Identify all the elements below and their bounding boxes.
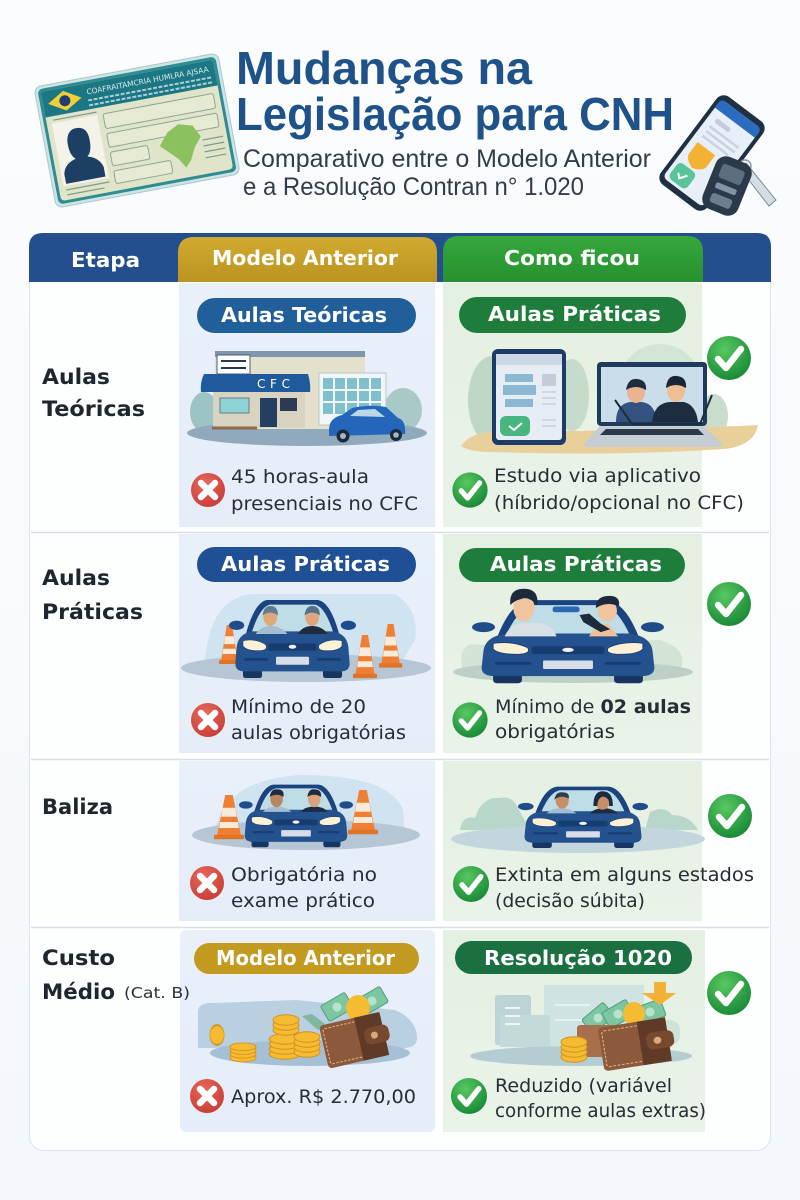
- pill: [194, 943, 419, 974]
- row label: Custo: [42, 946, 115, 970]
- icon: small check: [452, 472, 488, 508]
- icon: driver licence card: [34, 53, 240, 208]
- column heading: Como ficou: [443, 236, 703, 282]
- text: [495, 696, 691, 743]
- header bar: [29, 233, 771, 282]
- panel: new model: [443, 534, 702, 753]
- text: Mínimo de 02 aulas: [495, 696, 691, 718]
- text: [231, 864, 377, 912]
- text: Mínimo de 20: [231, 696, 366, 718]
- panel: new model: [443, 761, 754, 921]
- pill: [459, 297, 686, 333]
- title: Legislação para CNH: [236, 88, 674, 140]
- text: (híbrido/opcional no CFC): [494, 492, 744, 514]
- icon: small check: [452, 702, 488, 738]
- title: Mudanças na: [236, 42, 532, 94]
- column heading: Modelo Anterior: Modelo Anterior: [212, 246, 398, 270]
- text: presenciais no CFC: [231, 493, 418, 515]
- illustration: car with instructor and student: [453, 589, 693, 683]
- column heading: Modelo Anterior: [178, 237, 437, 282]
- text: Extinta em alguns estados: [495, 864, 754, 886]
- icon: cross: [190, 866, 224, 900]
- pill: [197, 547, 416, 582]
- panel: previous model: [179, 761, 435, 921]
- text: (decisão súbita): [495, 890, 645, 912]
- illustration: driving school building: CFC: [257, 377, 290, 391]
- row label: (Cat. B): [124, 984, 190, 1002]
- row label: Médio: [42, 980, 115, 1004]
- row label: [42, 946, 190, 1004]
- pill: Aulas Práticas: [221, 552, 390, 576]
- text: obrigatórias: [495, 721, 615, 743]
- text: [494, 465, 744, 514]
- row label: Baliza: [42, 795, 113, 819]
- panel: new model: [443, 930, 706, 1132]
- illustration: wallet and coins: [198, 986, 417, 1069]
- subtitle: e a Resolução Contran n° 1.020: [243, 173, 584, 201]
- panel: previous model: [180, 930, 435, 1132]
- icon: large check: [708, 794, 752, 838]
- pill: Aulas Práticas: [490, 552, 662, 576]
- text: Reduzido (variável: [495, 1075, 672, 1097]
- pill: [455, 941, 692, 974]
- title: [236, 42, 674, 140]
- icon: driver licence card: COAFRAITAMCRIA HUMLRA AJSAA: [86, 65, 210, 96]
- pill: Aulas Teóricas: [221, 303, 387, 327]
- text: aulas obrigatórias: [231, 722, 406, 744]
- illustration: car between cones: [192, 775, 420, 850]
- pill: Modelo Anterior: [216, 946, 395, 970]
- icon: cross: [190, 1079, 224, 1113]
- text: [231, 696, 406, 744]
- column heading: Etapa: Etapa: [71, 248, 140, 272]
- illustration: driving school building: [187, 351, 427, 446]
- icon: small check: [453, 866, 489, 902]
- pill: [197, 298, 416, 333]
- row label: Teóricas: [42, 397, 145, 421]
- pill: [459, 548, 685, 582]
- row label: [42, 566, 143, 624]
- illustration: fuller wallet with arrow down: [470, 982, 692, 1071]
- illustration: online study on tablet and laptop: [461, 344, 758, 453]
- row label: Práticas: [42, 600, 143, 624]
- panel: previous model: [179, 534, 435, 753]
- row: Baliza: [42, 761, 754, 921]
- icon: small check: [451, 1078, 487, 1114]
- text: [495, 864, 754, 912]
- panel: comparison table: [29, 233, 771, 1150]
- text: conforme aulas extras): [495, 1100, 706, 1122]
- icon: large check: [707, 582, 751, 626]
- row label: Aulas: [42, 365, 110, 389]
- text: [231, 466, 418, 515]
- panel: previous model: [179, 283, 435, 527]
- illustration: car with cones: [181, 594, 431, 682]
- row: Aulas Teóricas: [42, 283, 758, 527]
- row: Custo Médio: [42, 930, 751, 1132]
- text: Obrigatória no: [231, 864, 377, 886]
- row label: Aulas: [42, 566, 110, 590]
- icon: cross: [191, 473, 225, 507]
- subtitle: Comparativo entre o Modelo Anterior: [243, 145, 651, 173]
- text: [495, 1075, 706, 1122]
- icon: cross: [191, 703, 225, 737]
- row label: [42, 365, 145, 421]
- column heading: Como ficou: Como ficou: [504, 246, 640, 270]
- pill: Aulas Práticas: [488, 302, 661, 326]
- row: Aulas Práticas: [42, 534, 751, 753]
- icon: large check: [707, 971, 751, 1015]
- pill: Resolução 1020: [484, 946, 672, 970]
- text: exame prático: [231, 890, 375, 912]
- illustration: car on road with bushes: [451, 787, 705, 853]
- panel: new model: [443, 283, 758, 527]
- icon: large check: [707, 336, 751, 380]
- text: Estudo via aplicativo: [494, 465, 701, 487]
- text: 45 horas-aula: [231, 466, 369, 488]
- subtitle: [243, 145, 651, 201]
- text: Aprox. R$ 2.770,00: [231, 1086, 416, 1108]
- icon: phone and car key: [656, 92, 776, 219]
